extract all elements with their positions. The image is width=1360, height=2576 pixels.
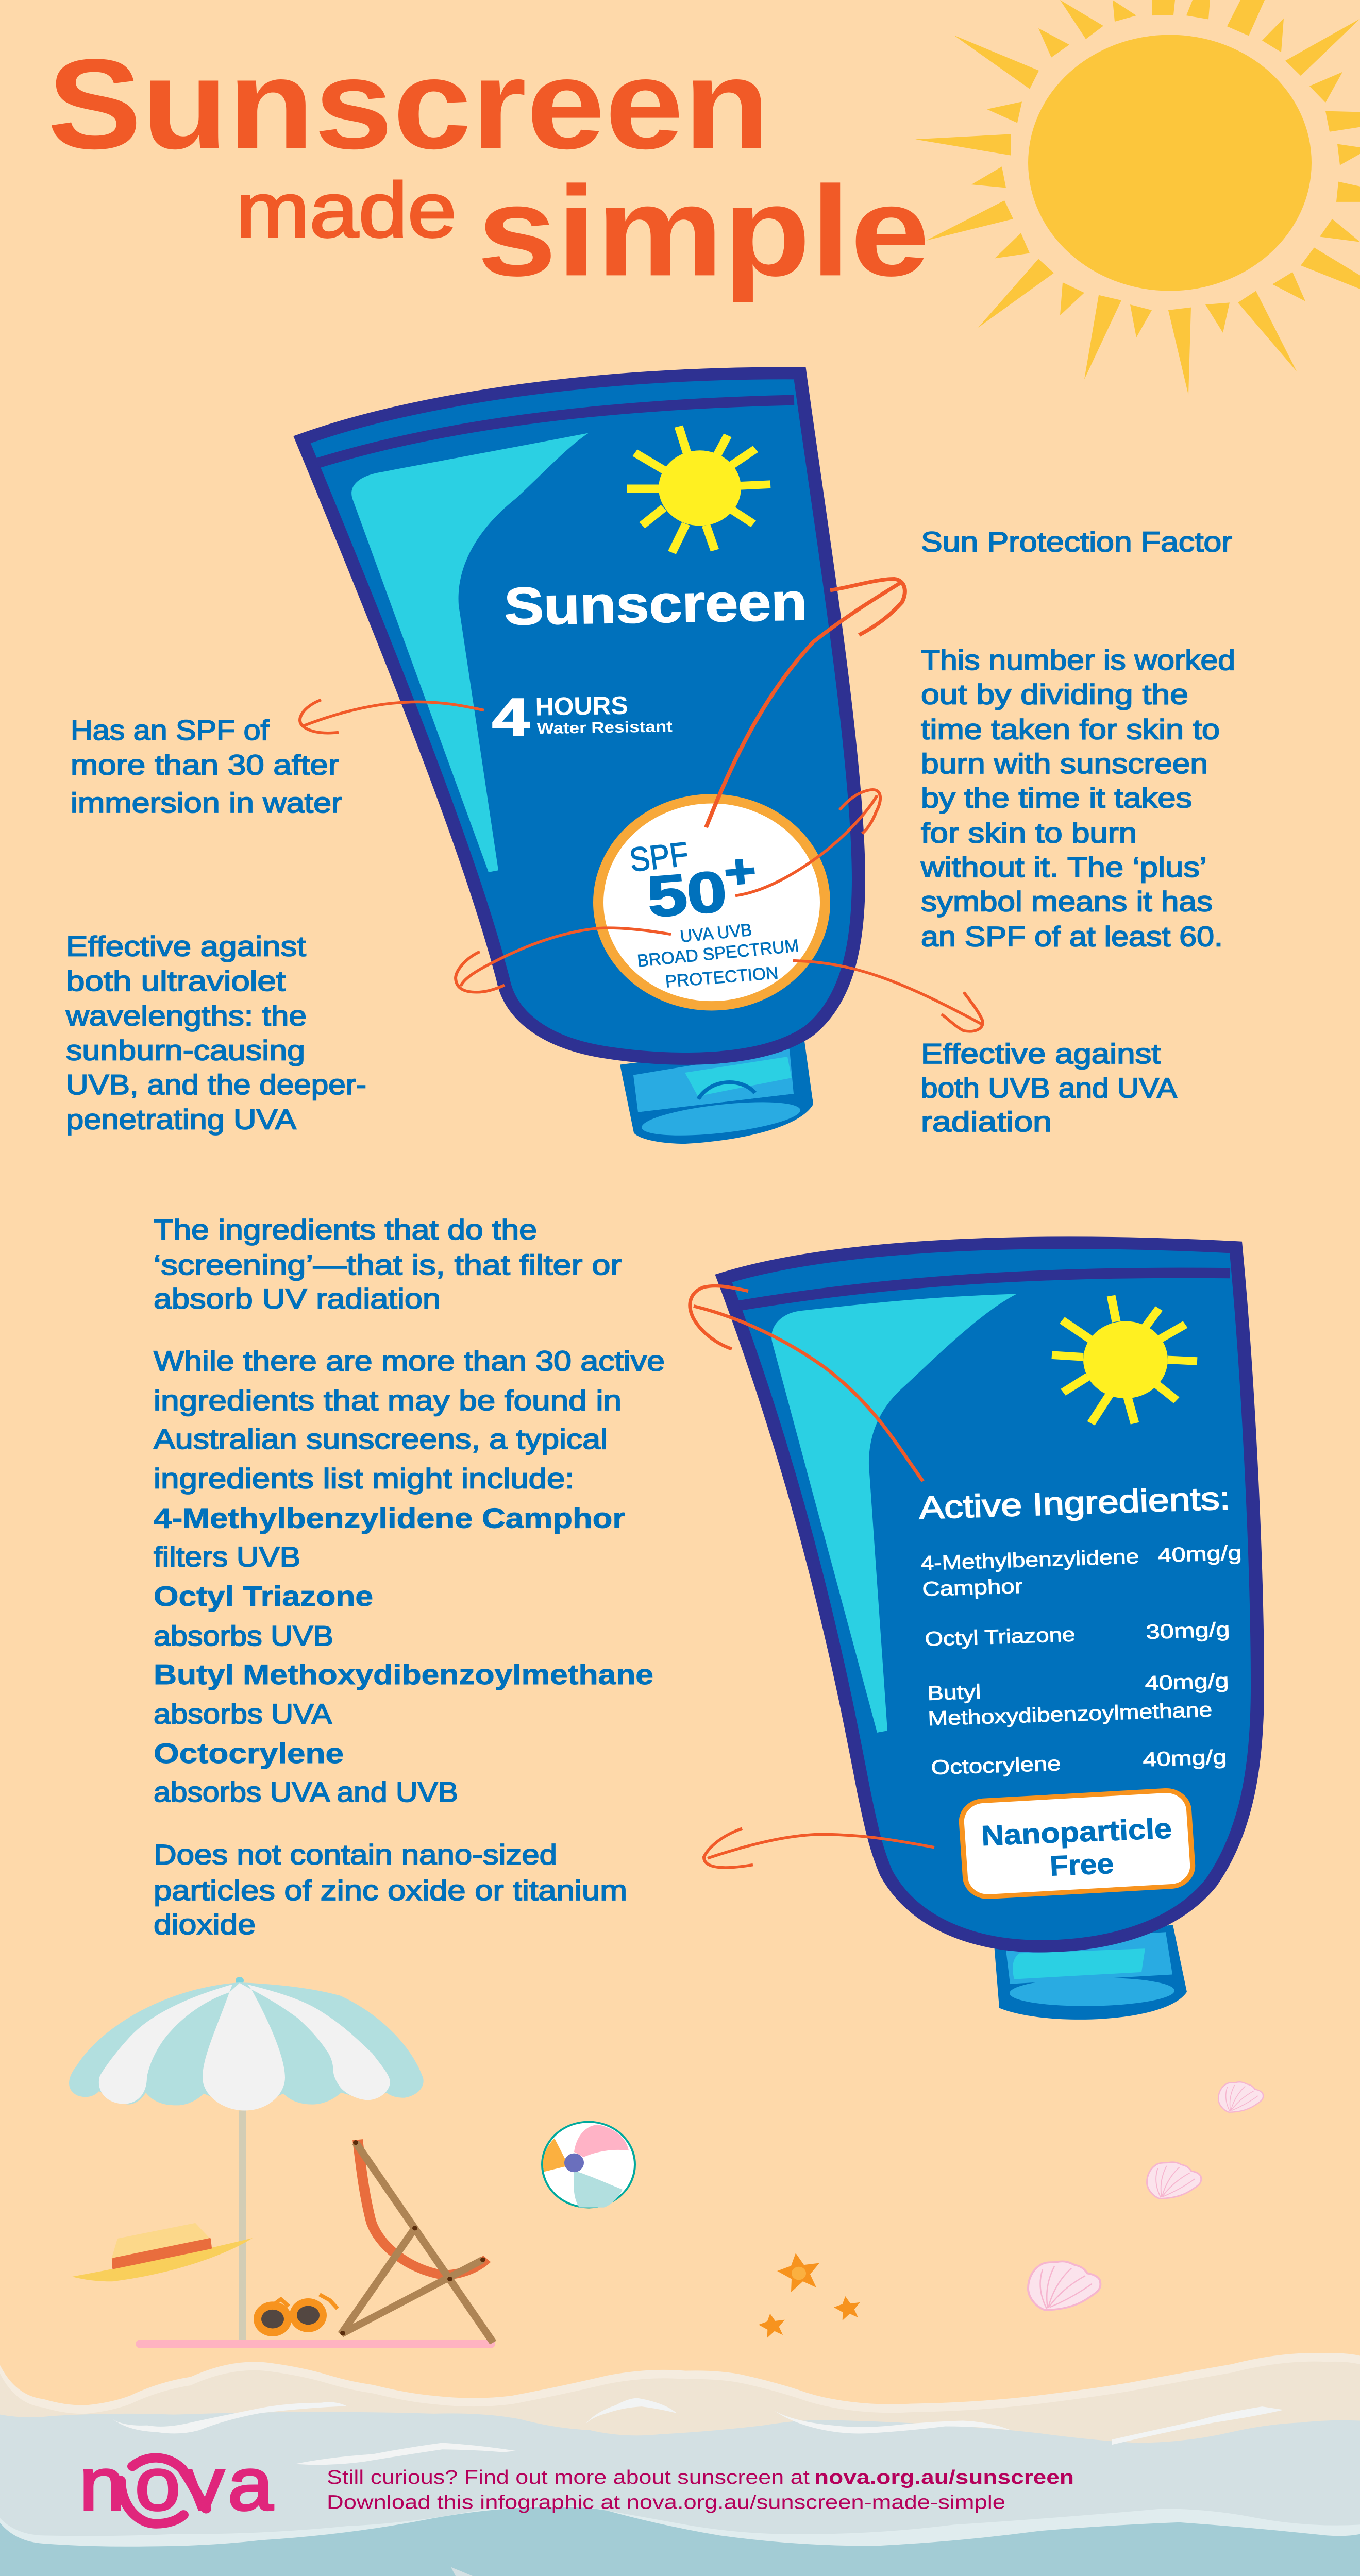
arrow: active ingredients xyxy=(690,1286,923,1481)
ingredient list on tube: Octocrylene xyxy=(931,1752,1061,1779)
ingredient details: filters UVB xyxy=(154,1541,300,1573)
ingredient list on tube: Octyl Triazone xyxy=(925,1623,1076,1650)
SPF badge: SPF xyxy=(627,835,691,879)
ingredient list on tube: 40mg/g xyxy=(1157,1541,1242,1567)
illustration: beach ball xyxy=(542,2122,635,2208)
illustration: starfish xyxy=(759,2253,860,2338)
illustration: beach umbrella xyxy=(69,1977,424,2341)
ingredient details: absorbs UVB xyxy=(154,1620,333,1652)
text block: wavelengths meaning: UVB, and the deeper- xyxy=(66,1069,366,1100)
ingredient panel heading: Active Ingredients: xyxy=(918,1480,1231,1526)
text block: broad spectrum meaning: radiation xyxy=(921,1107,1052,1138)
tube highlight xyxy=(351,433,589,872)
SPF badge: PROTECTION xyxy=(664,963,779,991)
footer text: Download this infographic at nova.org.au/sunscreen-made-simple xyxy=(327,2491,1005,2513)
text block: sun protection factor: time taken for skin to xyxy=(921,714,1220,745)
ingredient details: Octyl Triazone xyxy=(154,1581,373,1613)
SPF badge xyxy=(598,799,825,1006)
tube body xyxy=(724,1243,1257,1946)
ingredient details: absorbs UVA xyxy=(154,1699,332,1730)
text block: wavelengths meaning: both ultraviolet xyxy=(66,965,286,997)
tube crimp band xyxy=(317,400,794,463)
water resistant mark: Water Resistant xyxy=(536,717,673,737)
text block: sun protection factor: Sun Protection Factor xyxy=(921,527,1232,558)
ingredient details xyxy=(154,1503,653,1808)
text block: water resistance meaning: immersion in water xyxy=(71,787,342,819)
tube body xyxy=(302,373,859,1059)
title xyxy=(47,33,930,303)
text block: active ingredients explanation: The ingredients that do the xyxy=(154,1214,537,1246)
arrow: plus symbol explanation xyxy=(735,790,880,896)
nanoparticle free label xyxy=(960,1789,1194,1898)
illustration: shoreline and waves xyxy=(0,2353,1360,2576)
arrow: nanoparticle free xyxy=(704,1828,934,1868)
text block: sun protection factor: out by dividing the xyxy=(921,679,1188,710)
footer text: Still curious? Find out more about sunscreen at xyxy=(327,2466,810,2488)
arrow: water resistance xyxy=(300,700,484,733)
ingredient list on tube: Camphor xyxy=(922,1574,1023,1601)
text block: nanoparticle meaning: dioxide xyxy=(154,1909,256,1940)
icon: tube sun xyxy=(627,427,770,553)
text block: nanoparticle meaning xyxy=(154,1839,627,1940)
tube highlight xyxy=(771,1294,1017,1733)
ingredient list on tube: Butyl xyxy=(927,1680,981,1704)
illustration: first sunscreen tube xyxy=(302,373,859,1144)
arrow: ultraviolet wavelengths xyxy=(456,928,671,992)
ingredient list on tube: 40mg/g xyxy=(1143,1745,1227,1771)
illustration: shells xyxy=(1028,2082,1263,2310)
nanoparticle free label: Free xyxy=(1049,1848,1114,1882)
ingredient list on tube: 40mg/g xyxy=(1145,1669,1229,1694)
arrow: broad spectrum xyxy=(793,961,983,1031)
title: Sunscreen xyxy=(47,33,770,176)
SPF badge: 50 xyxy=(644,859,730,929)
text block: water resistance meaning: Has an SPF of xyxy=(71,715,270,747)
text block: sun protection factor: burn with sunscreen xyxy=(921,748,1208,779)
text block: sun protection factor: an SPF of at least 60. xyxy=(921,921,1223,953)
water resistant mark xyxy=(492,687,673,747)
title: simple xyxy=(477,160,930,303)
text block: active ingredients explanation xyxy=(154,1214,665,1495)
text block: wavelengths meaning xyxy=(65,931,366,1136)
footer text: nova.org.au/sunscreen xyxy=(814,2466,1074,2488)
text block: wavelengths meaning: sunburn-causing xyxy=(66,1035,305,1066)
illustration: sunglasses xyxy=(254,2295,338,2336)
text block: active ingredients explanation: While there are more than 30 active xyxy=(154,1346,665,1377)
logo: nova: nova xyxy=(79,2443,274,2526)
ingredient list on tube: 4-Methylbenzylidene xyxy=(920,1545,1139,1574)
text block: sun protection factor: for skin to burn xyxy=(921,818,1137,849)
ingredient list on tube xyxy=(920,1541,1242,1779)
text block: sun protection factor: without it. The ‘plus’ xyxy=(920,852,1207,883)
text block: broad spectrum meaning xyxy=(921,1038,1178,1138)
footer text xyxy=(327,2466,1074,2513)
tube cap xyxy=(994,1925,1187,2020)
tube product name: Sunscreen xyxy=(503,572,808,636)
ingredient details: 4-Methylbenzylidene Camphor xyxy=(154,1503,625,1534)
text block: active ingredients explanation: ‘screening’—that is, that filter or xyxy=(154,1249,622,1281)
ingredient list on tube: Methoxydibenzoylmethane xyxy=(928,1698,1213,1730)
ingredient details: Butyl Methoxydibenzoylmethane xyxy=(154,1659,653,1690)
tube crimp band xyxy=(739,1273,1230,1306)
text block: sun protection factor xyxy=(920,527,1235,953)
text block: water resistance meaning: more than 30 after xyxy=(71,750,339,781)
text block: broad spectrum meaning: Effective against xyxy=(921,1038,1161,1070)
SPF badge: BROAD SPECTRUM xyxy=(636,936,800,971)
text block: wavelengths meaning: Effective against xyxy=(66,931,306,962)
text block: sun protection factor: symbol means it has xyxy=(921,886,1213,918)
text block: active ingredients explanation: ingredients list might include: xyxy=(154,1463,574,1495)
arrow: sun protection factor xyxy=(706,579,905,827)
water resistant mark: 4 xyxy=(492,687,529,747)
illustration: deck chair xyxy=(340,2140,493,2343)
nanoparticle free label: Nanoparticle xyxy=(981,1813,1172,1852)
SPF badge: UVA UVB xyxy=(679,920,753,946)
ingredient details: Octocrylene xyxy=(154,1738,344,1770)
text block: active ingredients explanation: ingredients that may be found in xyxy=(154,1385,622,1416)
ingredient list on tube: 30mg/g xyxy=(1146,1618,1230,1643)
text block: active ingredients explanation: absorb UV radiation xyxy=(154,1283,441,1315)
icon: large sun xyxy=(915,0,1360,395)
illustration: towel xyxy=(136,2340,495,2348)
icon: tube sun xyxy=(1052,1296,1197,1423)
text block: wavelengths meaning: penetrating UVA xyxy=(66,1104,297,1136)
text block: wavelengths meaning: wavelengths: the xyxy=(65,1001,307,1032)
tube cap xyxy=(620,1041,813,1144)
text block: nanoparticle meaning: particles of zinc oxide or titanium xyxy=(154,1875,627,1907)
text block: nanoparticle meaning: Does not contain nano-sized xyxy=(154,1839,557,1871)
text block: broad spectrum meaning: both UVB and UVA xyxy=(921,1073,1178,1104)
illustration: sun hat xyxy=(72,2223,253,2281)
water resistant mark: HOURS xyxy=(535,691,628,721)
text block: sun protection factor: by the time it takes xyxy=(921,783,1192,814)
text block: sun protection factor: This number is worked xyxy=(921,645,1235,676)
illustration: second sunscreen tube xyxy=(724,1243,1257,2020)
ingredient details: absorbs UVA and UVB xyxy=(154,1777,458,1808)
SPF badge: + xyxy=(721,844,759,899)
text block: active ingredients explanation: Australian sunscreens, a typical xyxy=(154,1423,608,1455)
title: made xyxy=(236,167,457,253)
text block: water resistance meaning xyxy=(71,715,342,819)
